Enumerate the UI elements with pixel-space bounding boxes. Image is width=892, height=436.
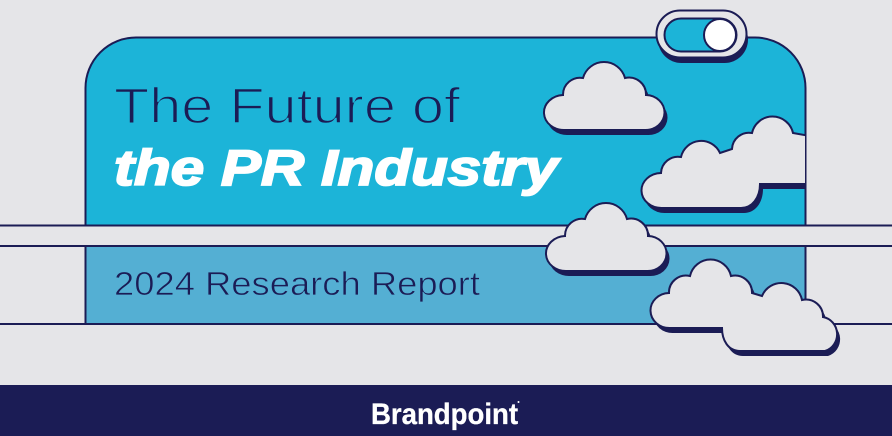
icon: cloud middle bbox=[546, 203, 670, 276]
icon: toggle switch bbox=[656, 10, 748, 63]
panel: subtitle band bbox=[86, 246, 806, 324]
panel: title card bbox=[86, 38, 806, 226]
icon: cloud top bbox=[544, 62, 668, 135]
icon: cloud right, clipped by card edge bbox=[641, 117, 813, 213]
icon: cloud lower double bbox=[651, 260, 840, 356]
subtitle: 2024 Research Report bbox=[114, 265, 480, 302]
logo: Brandpoint: Brandpoint bbox=[371, 398, 518, 431]
footer bar bbox=[0, 385, 892, 436]
title line two: the PR Industry bbox=[114, 140, 561, 196]
title line one: The Future of bbox=[114, 78, 460, 134]
